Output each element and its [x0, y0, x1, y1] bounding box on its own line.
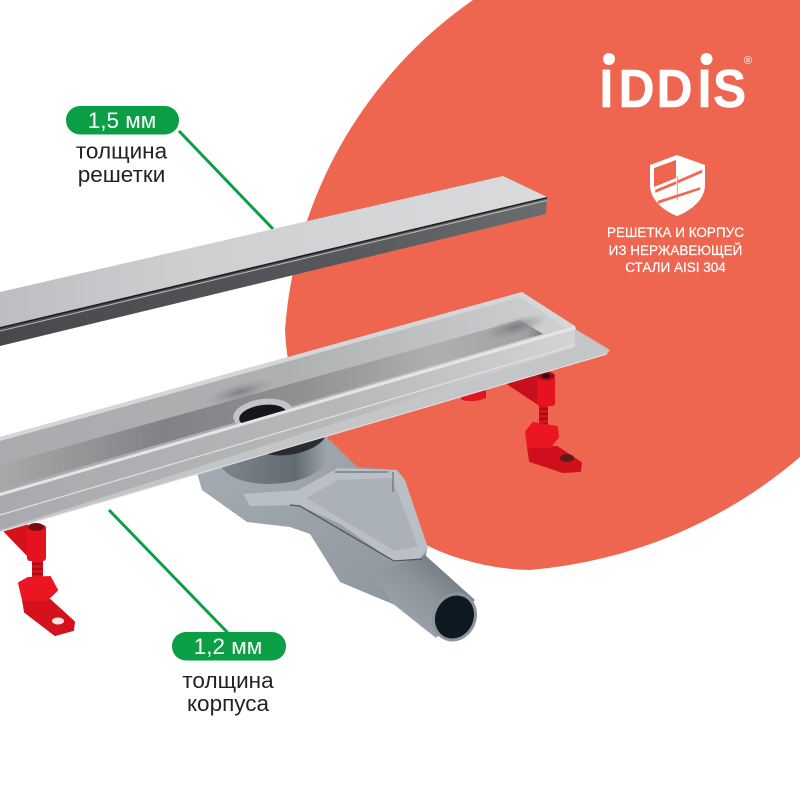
- coral background shape: [285, 0, 800, 570]
- badge: 1,5 mm: [66, 106, 179, 134]
- text: material note: РЕШЕТКА И КОРПУС: [607, 225, 744, 240]
- channel front wall: [0, 328, 575, 530]
- label: grate thickness: толщина: [76, 138, 168, 164]
- product: right red foot: [460, 372, 581, 472]
- badge: 1,2 mm: 1,2 мм: [194, 634, 262, 659]
- product: drain trap: [197, 428, 485, 649]
- text: material note: СТАЛИ AISI 304: [625, 260, 726, 275]
- channel rim back right: [0, 292, 575, 441]
- trap cup: [220, 430, 328, 484]
- trap lower housing: [197, 440, 427, 605]
- trap triangular lid: [243, 468, 428, 562]
- icon: shield: [650, 155, 705, 216]
- label: body thickness: корпуса: [187, 691, 270, 716]
- badge: 1,2 mm: [172, 632, 286, 660]
- product: grate bar: [0, 176, 547, 346]
- product: channel body: [0, 292, 610, 532]
- logo: IDDIS: IDDIS: [600, 58, 746, 118]
- text: material note: [607, 225, 744, 275]
- text: material note: ИЗ НЕРЖАВЕЮЩЕЙ: [609, 243, 742, 258]
- drain opening: [231, 395, 295, 433]
- trap outlet pipe: [373, 555, 475, 638]
- product: left red foot: [2, 522, 74, 635]
- channel back wall: [0, 292, 575, 495]
- callout line: body thickness: [109, 510, 228, 633]
- logo: IDDIS: ®: [744, 55, 752, 67]
- grate top face: [0, 176, 547, 327]
- label: grate thickness: решетки: [78, 162, 165, 187]
- callout line: grate thickness: [179, 131, 273, 229]
- label: body thickness: [182, 668, 274, 716]
- badge: 1,5 mm: 1,5 мм: [88, 108, 156, 133]
- label: body thickness: толщина: [182, 668, 274, 693]
- channel floor: [0, 320, 543, 490]
- label: grate thickness: [76, 138, 168, 187]
- grate side face: [0, 198, 547, 346]
- channel flange: [0, 327, 610, 532]
